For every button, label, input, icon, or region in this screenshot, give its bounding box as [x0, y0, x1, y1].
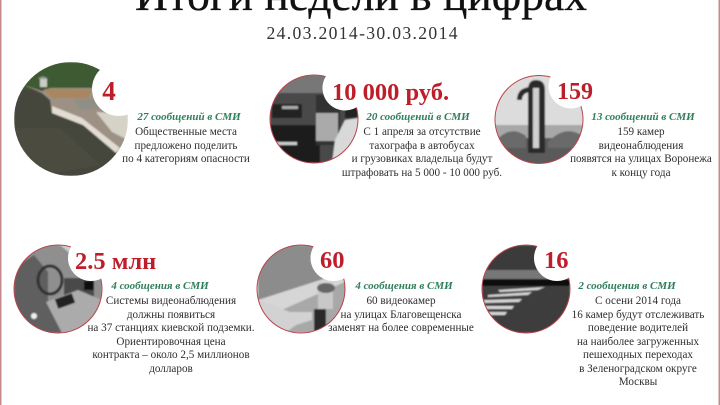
- description: [122, 126, 250, 165]
- description: должны появиться: [127, 309, 215, 321]
- media count: 27 сообщений в СМИ: [136, 111, 241, 123]
- description: [342, 126, 502, 179]
- description: 60 видеокамер: [366, 295, 436, 307]
- description: контракта – около 2,5 миллионов: [92, 349, 250, 361]
- number: 16: [544, 247, 568, 274]
- description: заменят на более современные: [328, 322, 474, 334]
- description: появятся на улицах Воронежа: [570, 153, 712, 165]
- panel: tachograph: [270, 66, 502, 179]
- number notch: [310, 235, 356, 281]
- description: Общественные места: [135, 126, 237, 138]
- photo: tachograph: [270, 75, 358, 163]
- number notch: [68, 235, 114, 281]
- description: долларов: [149, 363, 193, 375]
- media count: 4 сообщения в СМИ: [354, 280, 453, 292]
- description: [572, 295, 704, 388]
- description: тахографа в автобусах: [369, 140, 475, 152]
- description: [87, 295, 255, 375]
- photo: city sign: [495, 75, 583, 164]
- description: С осени 2014 года: [595, 295, 681, 307]
- panel: Kyiv metro: [14, 235, 255, 375]
- description: С 1 апреля за отсутствие: [363, 126, 481, 138]
- number: 10 000 руб.: [332, 79, 449, 106]
- description: к концу года: [611, 167, 671, 179]
- description: на 37 станциях киевской подземки.: [87, 322, 255, 334]
- description: предложено поделить: [135, 140, 237, 152]
- panel: Blagoveshchensk cameras: [256, 244, 474, 334]
- media count: 4 сообщения в СМИ: [110, 280, 209, 292]
- description: поведение водителей: [588, 322, 688, 334]
- description: на наиболее загруженных: [577, 336, 699, 348]
- photo: embankment: [14, 62, 128, 176]
- number: 4: [102, 76, 116, 106]
- description: 16 камер будут отслеживать: [572, 309, 704, 321]
- description: видеонаблюдения: [599, 140, 683, 152]
- number: 2.5 млн: [75, 248, 156, 275]
- photo: pedestrian crossing: [482, 245, 570, 333]
- number: 60: [320, 247, 344, 274]
- panel: Voronezh cameras: [494, 75, 712, 178]
- panel: public places: [14, 62, 250, 176]
- date range: 24.03.2014-30.03.2014: [266, 23, 458, 43]
- photo: CCTV camera: [257, 245, 346, 333]
- description: штрафовать на 5 000 - 10 000 руб.: [342, 167, 502, 179]
- description: Системы видеонаблюдения: [106, 295, 236, 307]
- number notch: [548, 64, 594, 108]
- number notch: [534, 235, 580, 281]
- description: по 4 категориям опасности: [122, 153, 250, 165]
- number notch: [92, 62, 146, 116]
- description: пешеходных переходах: [583, 349, 693, 361]
- description: и грузовиках владельца будут: [352, 153, 493, 165]
- description: [328, 295, 474, 334]
- media count: 2 сообщения в СМИ: [577, 280, 676, 292]
- panel: Zelenograd cameras: [482, 235, 704, 388]
- description: 159 камер: [617, 126, 665, 138]
- description: в Зеленоградском округе: [579, 363, 697, 375]
- number: 159: [557, 79, 593, 105]
- number notch: [322, 66, 368, 110]
- photo: officer in car: [14, 245, 102, 333]
- media count: 13 сообщений в СМИ: [591, 111, 695, 123]
- media count: 20 сообщений в СМИ: [365, 111, 470, 123]
- description: на улицах Благовещенска: [341, 309, 462, 321]
- description: [570, 126, 712, 179]
- description: Москвы: [619, 376, 658, 388]
- description: Ориентировочная цена: [116, 336, 226, 348]
